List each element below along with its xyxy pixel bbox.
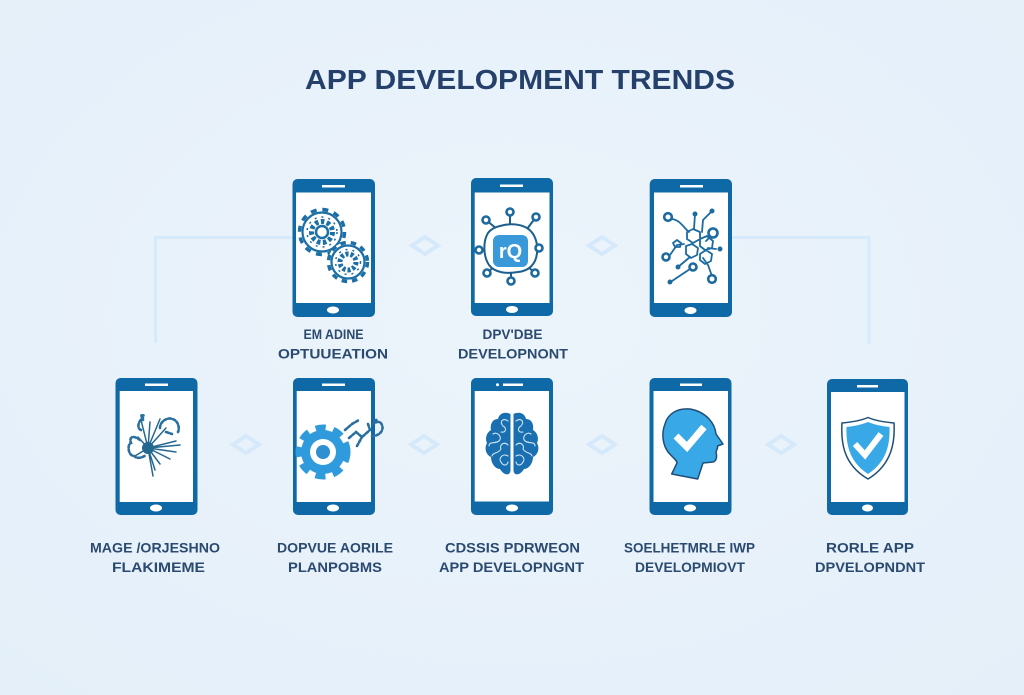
panel: mobile platforms [277,378,393,575]
label: DPV'DBE [482,326,542,342]
panel: network phone [650,179,732,317]
phone body [827,379,908,515]
label: CDSSIS PDRWEON [445,540,580,556]
icon: brain [486,413,538,474]
label: DPVELOPNDNT [815,559,925,575]
icon: head with check [663,409,723,479]
label [90,540,220,575]
phone body [471,178,553,316]
icon: shield with check [842,418,894,479]
label: SOELHETMRLE IWP [624,540,755,556]
icon: molecular network [662,208,722,284]
label: DOPVUE AORILE [277,540,393,556]
diamond connector 6 [768,436,794,453]
label [439,540,584,575]
diamond connector 1 [412,237,438,254]
panel: emadine optimisation [278,179,388,362]
panel: scalable app development [624,378,755,575]
panel: machine learning [90,378,220,575]
label: OPTUUEATION [278,346,388,362]
diamond connector 2 [589,237,615,254]
phone body [650,179,732,317]
label: DEVELOPMIOVT [635,559,745,575]
label: DEVELOPNONT [458,346,568,362]
label [458,326,568,362]
icon: blue gear with fragments [299,419,383,476]
panel: cross-platform app development [439,378,584,575]
panel: mobile app development [815,379,925,575]
panel: device development [458,178,568,362]
diamond connector 5 [589,436,615,453]
label [278,326,388,362]
phone body [292,179,375,317]
label [815,540,925,575]
label [624,540,755,575]
label: FLAKIMEME [112,559,205,575]
icon: connected chip [476,208,542,284]
icon: connected chip: rQ [499,241,522,263]
phone body [650,378,732,515]
label: MAGE /ORJESHNO [90,540,220,556]
diamond connector 3 [233,436,259,453]
connector: right elbow [732,238,869,344]
phone body [293,378,375,515]
icon: neural burst [129,415,180,476]
label: APP DEVELOPNGNT [439,559,584,575]
label: EM ADINE [304,326,364,342]
connector: left elbow [156,238,293,343]
phone body [471,378,553,515]
title: APP DEVELOPMENT TRENDS [305,64,735,95]
phone body [116,378,198,515]
icon: interlocking gears [300,210,368,282]
diamond connector 4 [411,436,437,453]
label: RORLE APP [826,540,914,556]
label: PLANPOBMS [288,559,382,575]
label [277,540,393,575]
